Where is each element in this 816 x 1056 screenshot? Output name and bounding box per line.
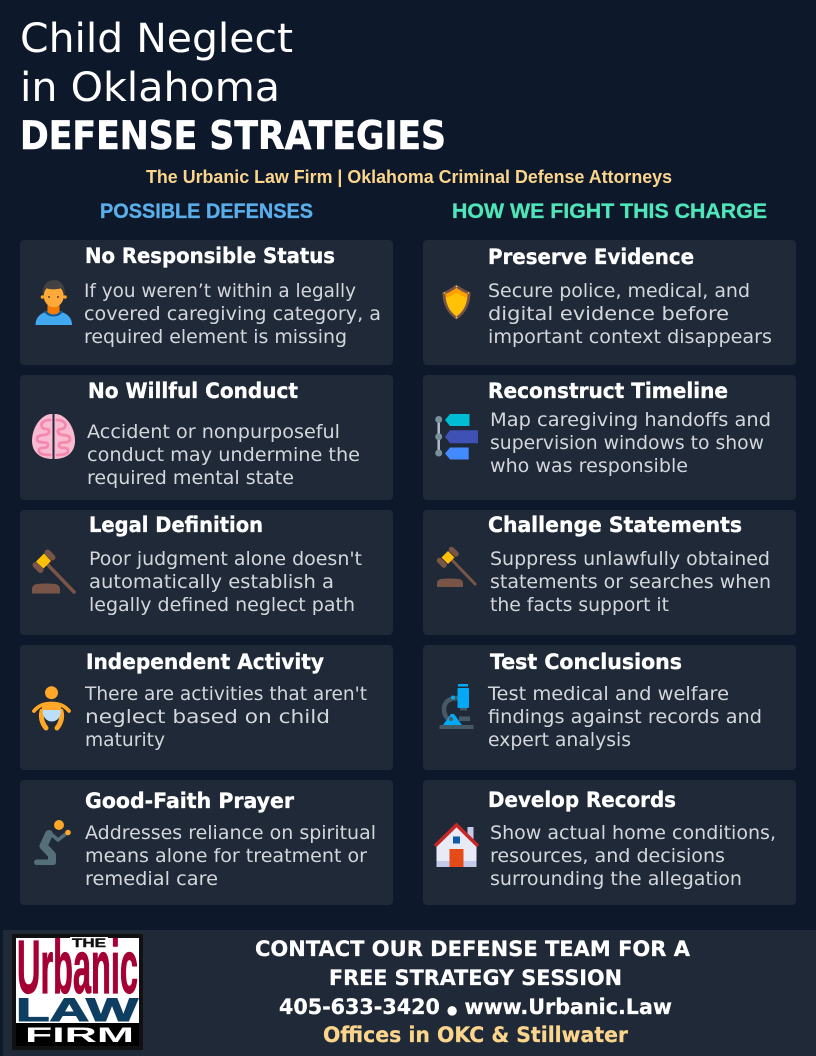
icon: house	[435, 825, 478, 867]
text block: resources, and decisions	[490, 845, 725, 867]
text block: Accident or nonpurposeful	[87, 421, 340, 443]
logo: THE	[72, 936, 106, 950]
heading: No Willful Conduct	[88, 379, 298, 403]
icon: person	[36, 280, 72, 325]
icon: gavel	[437, 550, 475, 587]
text block: Secure police, medical, and	[488, 280, 750, 302]
text block: statements or searches when	[490, 571, 771, 593]
icon: shield	[442, 284, 470, 320]
icon: gavel	[32, 552, 74, 594]
text block: required mental state	[87, 467, 294, 489]
panel: legal definition	[20, 510, 393, 635]
panel: preserve evidence	[423, 240, 796, 365]
icon: brain	[32, 414, 75, 459]
text block	[89, 548, 362, 616]
title: in Oklahoma	[20, 65, 280, 111]
text block: the facts support it	[490, 594, 669, 616]
text block: means alone for treatment or	[85, 845, 367, 867]
heading: Develop Records	[488, 788, 676, 812]
panel: good-faith prayer	[20, 780, 393, 905]
subtitle: The Urbanic Law Firm | Oklahoma Criminal Defense Attorneys	[146, 167, 672, 187]
panel: no responsible status	[20, 240, 393, 365]
text block: surrounding the allegation	[490, 868, 742, 890]
icon: timeline	[435, 414, 478, 460]
panel: independent activity	[20, 645, 393, 770]
text block	[488, 280, 772, 348]
icon: kneeling person	[34, 820, 71, 865]
heading: Preserve Evidence	[488, 245, 694, 269]
contact text: CONTACT OUR DEFENSE TEAM FOR A	[255, 937, 691, 961]
text block: Show actual home conditions,	[490, 822, 776, 844]
logo: FIRM	[25, 1024, 134, 1047]
icon: microscope	[440, 684, 474, 729]
text block	[87, 421, 360, 489]
icon: baby	[34, 686, 69, 728]
text block: neglect based on child	[85, 706, 330, 728]
text block	[487, 683, 762, 751]
panel: challenge statements	[423, 510, 796, 635]
contact text: 405-633-3420 ● www.Urbanic.Law	[279, 995, 672, 1019]
heading: Independent Activity	[86, 650, 324, 674]
logo	[12, 925, 143, 1050]
panel: test conclusions	[423, 645, 796, 770]
heading: Challenge Statements	[488, 513, 742, 537]
text block: Suppress unlawfully obtained	[490, 548, 770, 570]
text block: automatically establish a	[89, 571, 334, 593]
text block	[84, 280, 381, 348]
text block: If you weren’t within a legally	[84, 280, 356, 302]
text block: findings against records and	[488, 706, 762, 728]
text block: required element is missing	[84, 326, 347, 348]
text block: There are activities that aren't	[84, 683, 367, 705]
text block: who was responsible	[490, 455, 688, 477]
text block: Addresses reliance on spiritual	[85, 822, 376, 844]
panel: reconstruct timeline	[423, 375, 796, 500]
title: Child Neglect	[20, 16, 293, 62]
panel: develop records	[423, 780, 796, 905]
title: DEFENSE STRATEGIES	[20, 114, 446, 159]
heading: No Responsible Status	[85, 244, 335, 268]
text block: Test medical and welfare	[487, 683, 729, 705]
text block: conduct may undermine the	[87, 444, 360, 466]
text block: Poor judgment alone doesn't	[89, 548, 362, 570]
text block: maturity	[85, 729, 165, 751]
text block: important context disappears	[488, 326, 772, 348]
panel: no willful conduct	[20, 375, 393, 500]
contact text: Offices in OKC & Stillwater	[323, 1023, 629, 1047]
heading: possible defenses: POSSIBLE DEFENSES	[100, 200, 313, 223]
text block	[490, 822, 776, 890]
footer band: Urbanic	[17, 925, 138, 1009]
text block	[85, 822, 376, 890]
text block	[490, 548, 771, 616]
text block: covered caregiving category, a	[84, 303, 381, 325]
title	[20, 16, 446, 159]
text block: legally defined neglect path	[89, 594, 355, 616]
contact text: FREE STRATEGY SESSION	[329, 966, 622, 990]
text block: expert analysis	[488, 729, 631, 751]
text block: remedial care	[85, 868, 218, 890]
text block: Map caregiving handoffs and	[490, 409, 771, 431]
footer band	[3, 925, 816, 1056]
heading: Reconstruct Timeline	[488, 379, 728, 403]
heading: how we fight this charge: HOW WE FIGHT THIS CHARGE	[452, 200, 767, 223]
heading: Good-Faith Prayer	[85, 789, 295, 813]
heading: Legal Definition	[89, 513, 263, 537]
text block	[84, 683, 367, 751]
logo: LAW	[16, 992, 139, 1028]
contact text	[255, 937, 691, 1047]
text block	[490, 409, 771, 477]
heading: Test Conclusions	[490, 650, 682, 674]
text block: supervision windows to show	[490, 432, 764, 454]
text block: digital evidence before	[488, 303, 729, 325]
